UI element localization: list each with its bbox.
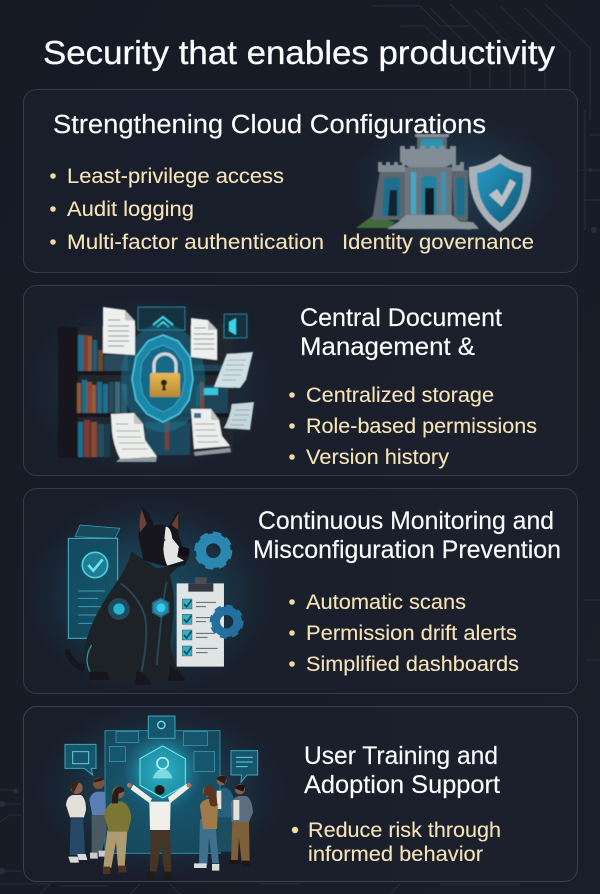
panel: continuous monitoring bbox=[24, 488, 578, 695]
heading: continuous monitoring and misconfiguration prevention: Misconfiguration Prevention bbox=[253, 536, 561, 564]
list: cloud configuration items bbox=[50, 164, 534, 254]
heading: user training and adoption support: User Training and bbox=[304, 742, 498, 770]
heading: central document management: Central Document bbox=[300, 304, 502, 332]
list: monitoring items: Simplified dashboards bbox=[306, 652, 519, 676]
list: cloud configuration items: Audit logging bbox=[67, 197, 194, 221]
list: document management items bbox=[289, 383, 537, 469]
title: Security that enables productivity bbox=[43, 34, 556, 71]
illustration: team around holographic screen bbox=[65, 716, 258, 880]
heading: continuous monitoring and misconfiguration prevention: Continuous Monitoring and bbox=[258, 507, 554, 535]
list: document management items: Role-based permissions bbox=[306, 414, 537, 438]
list: training items: Reduce risk through bbox=[308, 818, 501, 842]
list: monitoring items: Permission drift alerts bbox=[306, 621, 517, 645]
heading: central document management bbox=[300, 304, 502, 361]
heading: user training and adoption support bbox=[304, 742, 500, 799]
icon: castle and shield bbox=[356, 134, 531, 232]
heading: user training and adoption support: Adoption Support bbox=[304, 771, 500, 799]
illustration: bookshelf with lock and documents bbox=[58, 307, 254, 462]
heading: strengthening cloud configurations: Strengthening Cloud Configurations bbox=[53, 111, 486, 139]
illustration: robot dog with gears and checklist bbox=[65, 507, 242, 685]
list: training items bbox=[292, 818, 501, 866]
panel: user training and adoption support bbox=[24, 702, 578, 882]
list: cloud configuration items: Least-privilege access bbox=[67, 164, 284, 188]
list: cloud configuration items: Identity governance bbox=[342, 230, 534, 254]
heading: continuous monitoring and misconfiguration prevention bbox=[253, 507, 561, 564]
list: monitoring items bbox=[289, 590, 519, 676]
list: document management items: Centralized storage bbox=[306, 383, 494, 407]
list: document management items: Version history bbox=[306, 445, 449, 469]
panel: strengthening cloud configurations bbox=[24, 90, 578, 272]
heading: central document management: Management & bbox=[300, 333, 475, 361]
list: cloud configuration items: Multi-factor authentication bbox=[67, 230, 324, 254]
list: training items: informed behavior bbox=[308, 842, 483, 866]
list: monitoring items: Automatic scans bbox=[306, 590, 466, 614]
panel: central document management bbox=[24, 286, 578, 476]
